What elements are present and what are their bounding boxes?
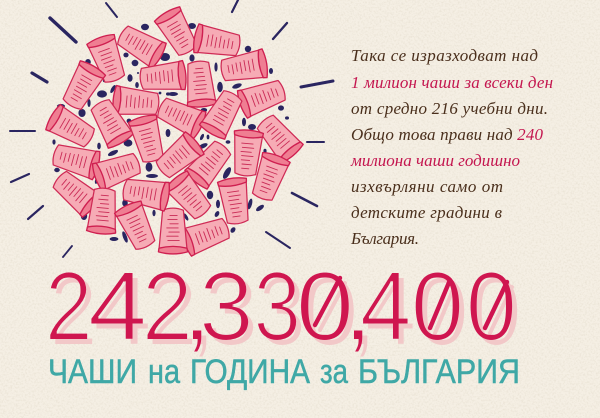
explanatory paragraph: Така се изразходват над <box>351 46 538 65</box>
big number 242,330,400: 0 <box>466 252 517 362</box>
burst rays around the cup circle <box>10 0 333 257</box>
cup <box>231 129 264 177</box>
cup <box>112 85 160 118</box>
big number shadow: 4 <box>365 257 416 367</box>
cup <box>121 175 171 211</box>
big number shadow: 0 <box>416 258 469 366</box>
big number shadow: 3 <box>258 258 306 366</box>
subtitle: за <box>320 353 348 391</box>
big number 242,330,400: 3 <box>199 251 254 361</box>
cup <box>236 76 289 119</box>
cup <box>128 113 168 165</box>
circle of plastic cups <box>44 5 305 257</box>
explanatory paragraph: 1 милион чаши за всеки ден <box>351 73 553 92</box>
cup <box>86 96 135 150</box>
subtitle: ГОДИНА <box>190 353 310 391</box>
subtitle: БЪЛГАРИЯ <box>358 353 520 391</box>
subtitle: на <box>148 353 180 391</box>
big number shadow: 2 <box>50 258 97 366</box>
cup <box>219 49 269 85</box>
big number 242,330,400 <box>45 251 517 362</box>
cup <box>153 5 202 59</box>
cup <box>139 60 187 93</box>
big number shadow: 0 <box>301 258 359 366</box>
explanatory paragraph: изхвърляни само от <box>351 177 503 196</box>
cup <box>44 103 98 152</box>
big number shadow: , <box>348 257 378 366</box>
explanatory paragraph: детските градини в <box>351 203 503 222</box>
big number shadow: 0 <box>471 257 522 367</box>
cup <box>86 33 129 86</box>
big number 242,330,400: 2 <box>45 253 92 361</box>
big number 242,330,400: 3 <box>254 253 301 361</box>
cup <box>50 140 102 180</box>
cup <box>152 130 206 182</box>
cup <box>58 59 107 113</box>
cup <box>183 137 235 191</box>
cup <box>49 167 103 219</box>
cup <box>158 208 188 254</box>
cup <box>217 176 252 226</box>
cup <box>184 60 217 108</box>
cup <box>163 169 215 223</box>
cup <box>192 24 242 60</box>
big number 242,330,400: , <box>182 252 212 361</box>
explanatory paragraph: България. <box>350 229 419 248</box>
explanatory paragraph: от средно 216 учебни дни. <box>351 99 548 118</box>
cup <box>114 21 168 70</box>
big number 242,330,400: , <box>343 252 373 361</box>
cup <box>154 94 208 139</box>
navy confetti blobs between cups <box>52 23 289 243</box>
big number 242,330,400: 4 <box>360 252 411 362</box>
big number shadow: 2 <box>147 257 198 367</box>
cup <box>114 199 159 253</box>
cup <box>91 149 144 192</box>
big number 242,330,400: 2 <box>142 252 193 362</box>
big number shadow: , <box>187 257 217 366</box>
explanatory paragraph: Общо това прави над 240 <box>351 125 544 144</box>
cup <box>198 87 247 141</box>
subtitle <box>48 353 520 391</box>
cup <box>86 187 119 235</box>
cup <box>180 214 233 257</box>
big number shadow <box>50 256 522 367</box>
cup <box>253 111 305 165</box>
subtitle: ЧАШИ <box>48 353 137 391</box>
cup <box>248 151 291 204</box>
explanatory paragraph: милиона чаши годишно <box>350 151 520 170</box>
big number 242,330,400: 0 <box>411 253 464 361</box>
big number shadow: 3 <box>204 256 259 366</box>
big number shadow: 4 <box>93 257 152 366</box>
big number 242,330,400: 0 <box>296 253 354 361</box>
big number 242,330,400: 4 <box>88 252 147 361</box>
explanatory paragraph <box>350 46 553 248</box>
